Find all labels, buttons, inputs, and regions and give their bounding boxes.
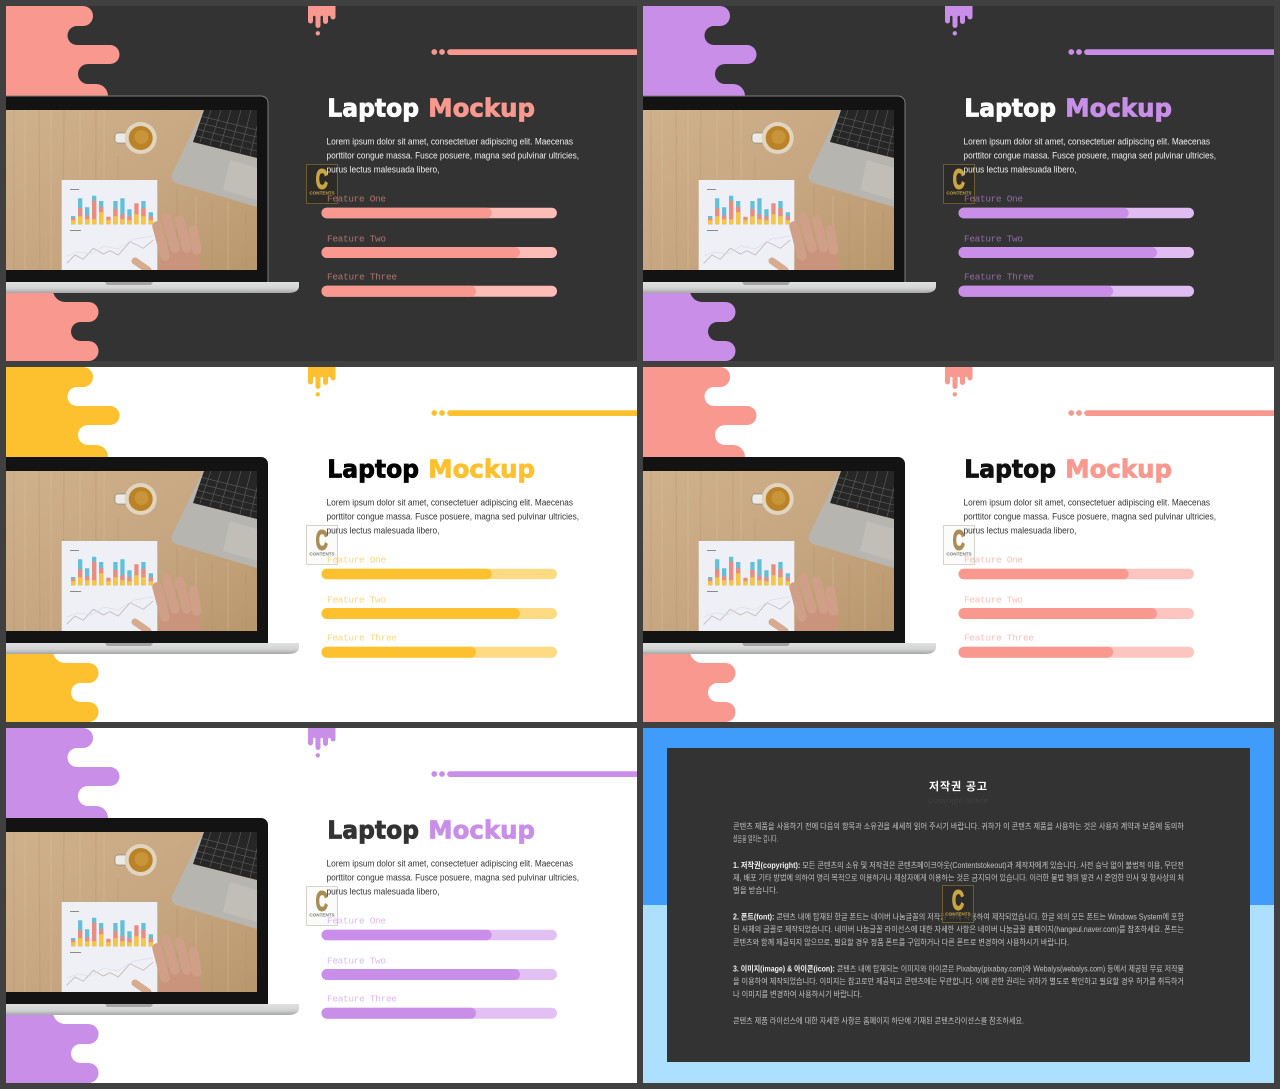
icon: drip xyxy=(945,367,972,396)
title xyxy=(964,94,1172,123)
body text: porttitor congue massa. Fusce posuere, magna sed pulvinar ultricies, xyxy=(326,512,579,522)
watermark xyxy=(944,164,974,204)
body text: purus lectus malesuada libero, xyxy=(964,164,1076,176)
watermark: CONTENTS xyxy=(946,552,972,556)
notice title: 저작권 공고 xyxy=(929,779,987,793)
title xyxy=(327,816,535,845)
feature three: Feature Three xyxy=(327,994,397,1004)
watermark xyxy=(306,886,338,926)
notice section 3: 나 이미지를 변경하여 사용하시기 바랍니다. xyxy=(733,989,862,999)
liquid blob top left xyxy=(6,728,120,818)
feature one xyxy=(958,194,1194,218)
feature two xyxy=(322,956,557,980)
feature one xyxy=(322,916,557,940)
dots and rule xyxy=(431,410,637,416)
liquid blob top left xyxy=(643,6,756,96)
title: Mockup xyxy=(428,455,535,484)
laptop bezel edge xyxy=(6,96,268,282)
title: Laptop xyxy=(327,816,419,845)
feature three xyxy=(322,632,557,658)
liquid blob top left xyxy=(6,367,120,457)
notice subtitle: Copyright Notice xyxy=(928,796,988,805)
watermark: C xyxy=(316,886,328,916)
notice section 1: 1. 저작권(copyright): 모든 콘텐츠의 소유 및 저작권은 콘텐츠메이크아웃(Contentstokeout)과 제작자에게 있습니다. 사전 승낙 없이 불법적 이용, 무단전 xyxy=(733,860,1184,870)
title: Laptop xyxy=(964,455,1056,484)
watermark: CONTENTS xyxy=(309,190,335,196)
dots and rule xyxy=(1068,410,1274,416)
slide background xyxy=(643,367,1274,722)
title: Laptop xyxy=(964,94,1056,123)
dark notice card xyxy=(667,748,1250,1062)
title: Mockup xyxy=(1065,455,1172,484)
watermark: C xyxy=(952,884,964,916)
watermark xyxy=(944,524,974,564)
light blue lower background xyxy=(643,905,1274,1083)
body text: porttitor congue massa. Fusce posuere, magna sed pulvinar ultricies, xyxy=(326,150,579,162)
notice section 1 xyxy=(733,860,1184,895)
title xyxy=(964,455,1172,484)
feature one: Feature One xyxy=(327,916,386,926)
feature one xyxy=(322,554,557,579)
feature one: Feature One xyxy=(964,554,1023,566)
feature one: Feature One xyxy=(327,554,386,566)
feature two: Feature Two xyxy=(964,594,1023,606)
watermark: CONTENTS xyxy=(309,552,335,556)
notice section 3: 3. 이미지(image) & 아이콘(icon): 콘텐츠 내에 탑재되는 이미지와 아이콘은 Pixabay(pixabay.com)와 Webalys(webalys.com) 등에서 제공된 무료 저작물 xyxy=(733,964,1184,974)
feature one xyxy=(322,194,557,218)
feature two xyxy=(322,234,557,258)
notice intro xyxy=(733,821,1184,844)
body text: Lorem ipsum dolor sit amet, consectetuer adipiscing elit. Maecenas xyxy=(326,858,573,870)
liquid blob top left xyxy=(6,6,120,96)
body text: porttitor congue massa. Fusce posuere, magna sed pulvinar ultricies, xyxy=(326,872,579,884)
notice section 1: 재, 배포 기타 방법에 의하여 영리 목적으로 이용하거나 제삼자에게 이용하는 것은 금지되어 있습니다. 이러한 불법 행위 발견 시 준엄한 민사 및 형사상의 처 xyxy=(733,872,1184,882)
laptop mockup xyxy=(6,818,299,1015)
body text: porttitor congue massa. Fusce posuere, magna sed pulvinar ultricies, xyxy=(964,150,1216,162)
panel: slide 1 coral dark xyxy=(6,6,637,361)
body text: porttitor congue massa. Fusce posuere, magna sed pulvinar ultricies, xyxy=(964,512,1216,522)
feature three: Feature Three xyxy=(327,632,397,644)
feature two: Feature Two xyxy=(964,234,1023,244)
notice section 2: 콘텐츠와 함께 제공되지 않으므로, 필요할 경우 정품 폰트를 구입하거나 다른 폰트로 변경하여 사용하시기 바랍니다. xyxy=(733,937,1069,947)
watermark xyxy=(306,524,338,564)
feature three xyxy=(322,272,557,297)
dots and rule xyxy=(431,49,637,55)
body text: purus lectus malesuada libero, xyxy=(326,886,440,898)
feature three xyxy=(322,994,557,1019)
slide background xyxy=(6,6,637,361)
body text: purus lectus malesuada libero, xyxy=(964,526,1076,536)
watermark: CONTENTS xyxy=(945,912,971,916)
laptop bezel edge xyxy=(643,96,905,282)
icon: drip xyxy=(308,6,336,36)
notice footer line: 콘텐츠 제품 라이선스에 대한 자세한 사항은 홈페이지 하단에 기재된 콘텐츠라이선스를 참조하세요. xyxy=(733,1016,1024,1026)
watermark: C xyxy=(316,164,328,194)
feature three: Feature Three xyxy=(964,272,1034,282)
slide background xyxy=(643,6,1274,361)
watermark: CONTENTS xyxy=(946,190,972,196)
feature two xyxy=(958,234,1194,258)
notice section 2 xyxy=(733,912,1184,947)
feature one xyxy=(958,554,1194,579)
laptop mockup xyxy=(6,457,299,654)
watermark: C xyxy=(953,164,965,194)
title: Mockup xyxy=(428,816,535,845)
title: Mockup xyxy=(1065,94,1172,123)
feature two: Feature Two xyxy=(327,956,386,966)
blue upper background xyxy=(643,728,1274,905)
notice section 3 xyxy=(733,964,1184,999)
feature two: Feature Two xyxy=(327,594,386,606)
notice section 2: 된 서체의 글꼴로 제작되었습니다. 네이버 나눔글꼴 라이선스에 대한 자세한 사항은 네이버 나눔글꼴 홈페이지(hangeul.naver.com)를 참조하세요. 폰트는 xyxy=(733,924,1184,934)
title: Laptop xyxy=(327,94,419,123)
body text: Lorem ipsum dolor sit amet, consectetuer adipiscing elit. Maecenas xyxy=(326,136,573,148)
liquid blob top left xyxy=(643,367,756,457)
icon: drip xyxy=(308,728,336,758)
title: Mockup xyxy=(428,94,535,123)
laptop mockup xyxy=(6,96,299,293)
notice section 1: 벌을 받습니다. xyxy=(733,885,778,895)
panel: slide 2 purple dark xyxy=(643,6,1274,361)
feature one: Feature One xyxy=(964,194,1023,204)
feature two: Feature Two xyxy=(327,234,386,244)
watermark: C xyxy=(953,524,965,556)
feature three xyxy=(958,632,1194,658)
liquid blob bottom left xyxy=(6,292,98,361)
liquid blob bottom left xyxy=(6,653,98,722)
watermark xyxy=(306,164,338,204)
liquid blob bottom left xyxy=(6,1014,98,1083)
feature three xyxy=(958,272,1194,297)
title xyxy=(327,455,535,484)
notice section 2: 2. 폰트(font): 콘텐츠 내에 탑재된 한글 폰트는 네이버 나눔글꼴의 저작권 하에 사용하여 제작되었습니다. 한글 외의 모든 폰트는 Windows System에 포함 xyxy=(733,912,1184,922)
body text: purus lectus malesuada libero, xyxy=(326,164,440,176)
watermark xyxy=(942,884,974,922)
panel: slide 3 yellow light xyxy=(6,367,637,722)
feature one: Feature One xyxy=(327,194,386,204)
panel: copyright notice xyxy=(643,728,1274,1083)
body text xyxy=(964,498,1216,536)
body text: purus lectus malesuada libero, xyxy=(326,526,440,536)
panel: slide 4 coral light xyxy=(643,367,1274,722)
watermark: C xyxy=(316,524,328,556)
notice section 3: 을 이용하여 제작되었습니다. 이미지는 참고로만 제공되고 콘텐츠에는 무관합니다. 이에 관한 권리는 귀하가 별도로 확인하고 필요할 경우 허가를 취득하거 xyxy=(733,976,1184,986)
watermark: CONTENTS xyxy=(309,912,335,918)
feature three: Feature Three xyxy=(327,272,397,282)
body text: Lorem ipsum dolor sit amet, consectetuer adipiscing elit. Maecenas xyxy=(326,498,573,508)
slide background xyxy=(6,728,637,1083)
icon: drip xyxy=(945,6,972,36)
body text xyxy=(326,858,579,898)
feature two xyxy=(322,594,557,619)
notice intro: 콘텐츠 제품을 사용하기 전에 다음의 항목과 소유권을 세세히 읽어 주시기 바랍니다. 귀하가 이 콘텐츠 제품을 사용하는 것은 사용자 계약과 보증에 동의하 xyxy=(733,821,1184,831)
laptop mockup xyxy=(643,457,936,654)
dots and rule xyxy=(1068,49,1274,55)
icon: drip xyxy=(308,367,336,396)
title: Laptop xyxy=(327,455,419,484)
panel: slide 5 purple light xyxy=(6,728,637,1083)
slide background xyxy=(6,367,637,722)
body text: Lorem ipsum dolor sit amet, consectetuer adipiscing elit. Maecenas xyxy=(964,498,1210,508)
title xyxy=(327,94,535,123)
body text: Lorem ipsum dolor sit amet, consectetuer adipiscing elit. Maecenas xyxy=(964,136,1210,148)
liquid blob bottom left xyxy=(643,292,736,361)
dots and rule xyxy=(431,771,637,777)
laptop mockup xyxy=(643,96,936,293)
liquid blob bottom left xyxy=(643,653,736,722)
body text xyxy=(326,136,579,176)
body text xyxy=(964,136,1216,176)
feature three: Feature Three xyxy=(964,632,1034,644)
feature two xyxy=(958,594,1194,619)
notice intro: 셨음을 알리는 겁니다. xyxy=(733,834,778,844)
body text xyxy=(326,498,579,536)
